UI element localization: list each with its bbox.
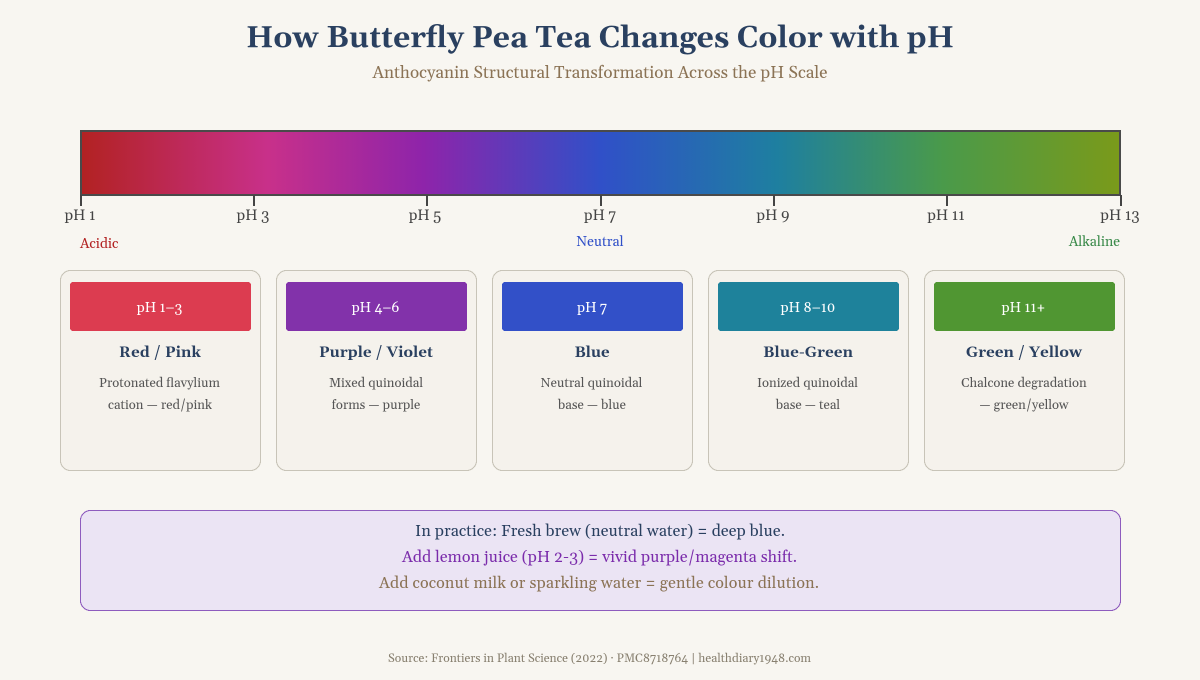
pH scale ticks and labels <box>65 195 1140 226</box>
label: alkaline: Alkaline <box>1068 233 1120 251</box>
panel: pH 11+: — green/yellow <box>979 398 1069 414</box>
panel: pH 8-10 <box>708 270 908 470</box>
panel: pH 11+: Green / Yellow <box>966 344 1083 363</box>
label: acidic: Acidic <box>79 235 118 253</box>
panel: pH 1-3 <box>60 270 260 470</box>
panel: pH 7: base — blue <box>557 398 626 414</box>
pH scale ticks and labels: pH 7 <box>584 207 616 226</box>
callout: in practice: Add coconut milk or sparkling water = gentle colour dilution. <box>378 574 819 594</box>
panel: pH 4-6 <box>276 270 476 470</box>
panel: pH 4-6: forms — purple <box>332 398 420 414</box>
panel: pH 7: Blue <box>574 344 610 363</box>
panel: pH 11+: pH 11+ <box>1002 299 1045 317</box>
panel: pH 7: Neutral quinoidal <box>541 376 643 392</box>
panel: pH 1-3: Protonated flavylium <box>99 376 220 392</box>
callout: in practice: In practice: Fresh brew (neutral water) = deep blue. <box>415 522 785 542</box>
panel: pH 4-6: Mixed quinoidal <box>329 376 423 392</box>
panel: pH 4-6: Purple / Violet <box>319 344 433 363</box>
panel: pH 11+ <box>924 270 1124 470</box>
pH scale ticks and labels: pH 13 <box>1100 207 1140 226</box>
title: How Butterfly Pea Tea Changes Color with pH <box>246 20 954 58</box>
panel: pH 8-10: pH 8–10 <box>781 299 835 317</box>
callout: in practice <box>80 510 1120 610</box>
panel: pH 11+: Chalcone degradation <box>961 376 1087 392</box>
pH scale ticks and labels: pH 5 <box>409 207 441 226</box>
panel: pH 7 <box>492 270 692 470</box>
pH gradient bar <box>81 131 1120 195</box>
source footer: Source: Frontiers in Plant Science (2022) · PMC8718764 | healthdiary1948.com <box>388 652 811 667</box>
pH scale ticks and labels: pH 9 <box>757 207 789 226</box>
pH scale ticks and labels: pH 11 <box>927 207 965 226</box>
panel: pH 4-6: pH 4–6 <box>352 299 399 317</box>
panel: pH 8-10: base — teal <box>775 398 840 414</box>
panel: pH 7: pH 7 <box>577 299 607 317</box>
panel: pH 8-10: Ionized quinoidal <box>757 376 858 392</box>
subtitle: Anthocyanin Structural Transformation Across the pH Scale <box>372 62 828 84</box>
panel: pH 1-3: cation — red/pink <box>108 398 212 414</box>
pH scale ticks and labels: pH 1 <box>65 207 95 226</box>
pH scale ticks and labels: pH 3 <box>237 207 269 226</box>
panel: pH 8-10: Blue-Green <box>763 344 854 363</box>
panel: pH 1-3: Red / Pink <box>119 344 202 363</box>
label: neutral: Neutral <box>576 233 624 251</box>
panel: pH 1-3: pH 1–3 <box>137 299 183 317</box>
callout: in practice: Add lemon juice (pH 2-3) = vivid purple/magenta shift. <box>401 548 797 568</box>
